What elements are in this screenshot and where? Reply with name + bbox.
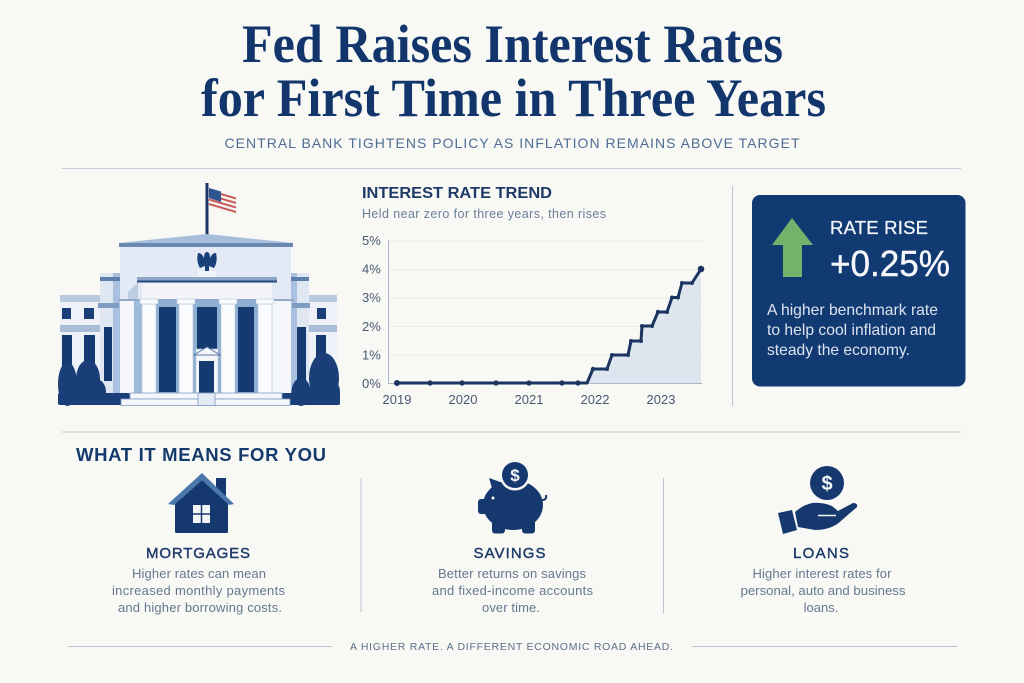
title	[201, 14, 826, 128]
panel: rate rise callout	[752, 195, 966, 386]
x axis labels: 2021	[515, 392, 543, 407]
description: increased monthly payments	[112, 583, 286, 598]
portico	[137, 277, 277, 280]
icon: green up arrow	[772, 218, 813, 277]
description: and fixed-income accounts	[432, 583, 594, 598]
callout label: RATE RISE	[830, 217, 928, 238]
title: for First Time in Three Years	[201, 68, 826, 128]
icon: piggy bank	[478, 460, 546, 534]
y axis labels: 1%	[362, 348, 381, 362]
description: personal, auto and business	[740, 583, 906, 598]
section heading: WHAT IT MEANS FOR YOU	[76, 444, 326, 465]
trees and ground	[58, 353, 340, 406]
chart: interest rate trend	[362, 185, 704, 407]
description	[112, 566, 286, 615]
x axis labels	[383, 392, 675, 407]
illustration: Federal Reserve building	[58, 183, 340, 406]
rate line	[397, 269, 701, 383]
chart subheading: Held near zero for three years, then rises	[362, 207, 606, 221]
footer tagline: A HIGHER RATE. A DIFFERENT ECONOMIC ROAD AHEAD.	[350, 641, 673, 653]
x axis labels: 2022	[581, 392, 609, 407]
description	[740, 566, 906, 615]
y axis labels: 3%	[362, 290, 381, 305]
description: loans.	[804, 600, 838, 615]
panel: loans	[740, 466, 906, 615]
description: over time.	[482, 600, 540, 615]
callout text	[767, 302, 938, 359]
steps	[121, 393, 290, 406]
description: and higher borrowing costs.	[118, 600, 282, 615]
roof	[119, 234, 293, 243]
x axis labels: 2023	[647, 392, 675, 407]
x axis labels: 2020	[449, 392, 477, 407]
heading: MORTGAGES	[146, 545, 250, 562]
y axis labels: 4%	[362, 262, 381, 276]
y axis labels: 0%	[362, 376, 381, 391]
y axis labels	[362, 233, 381, 391]
subtitle: CENTRAL BANK TIGHTENS POLICY AS INFLATION REMAINS ABOVE TARGET	[224, 135, 800, 151]
heading: SAVINGS	[474, 545, 546, 562]
panel: mortgages	[112, 473, 286, 615]
icon: house	[168, 473, 234, 533]
callout text: A higher benchmark rate	[767, 302, 938, 319]
eagle	[197, 252, 217, 277]
x axis labels: 2019	[383, 392, 411, 407]
description: Higher interest rates for	[752, 566, 892, 581]
chart heading: INTEREST RATE TREND	[362, 185, 552, 202]
callout value: +0.25%	[830, 243, 950, 284]
main block	[120, 246, 291, 394]
panel: savings	[432, 460, 594, 615]
columns	[140, 299, 274, 394]
outer wings	[60, 295, 102, 393]
description: Higher rates can mean	[132, 566, 266, 581]
callout text: to help cool inflation and	[767, 322, 936, 339]
icon: piggy bank: $	[510, 466, 520, 485]
description: Better returns on savings	[438, 566, 586, 581]
y axis labels: 2%	[362, 319, 381, 334]
data points	[394, 266, 704, 386]
callout text: steady the economy.	[767, 342, 910, 359]
inner wings	[100, 273, 120, 393]
door	[194, 347, 220, 394]
flag	[206, 183, 236, 235]
description	[432, 566, 594, 615]
icon: hand with coin	[778, 466, 857, 534]
y axis labels: 5%	[362, 233, 381, 248]
title: Fed Raises Interest Rates	[242, 14, 783, 74]
icon: hand with coin: $	[821, 473, 833, 495]
portico bays	[156, 300, 179, 394]
heading: LOANS	[793, 545, 849, 562]
area under line	[587, 269, 701, 383]
